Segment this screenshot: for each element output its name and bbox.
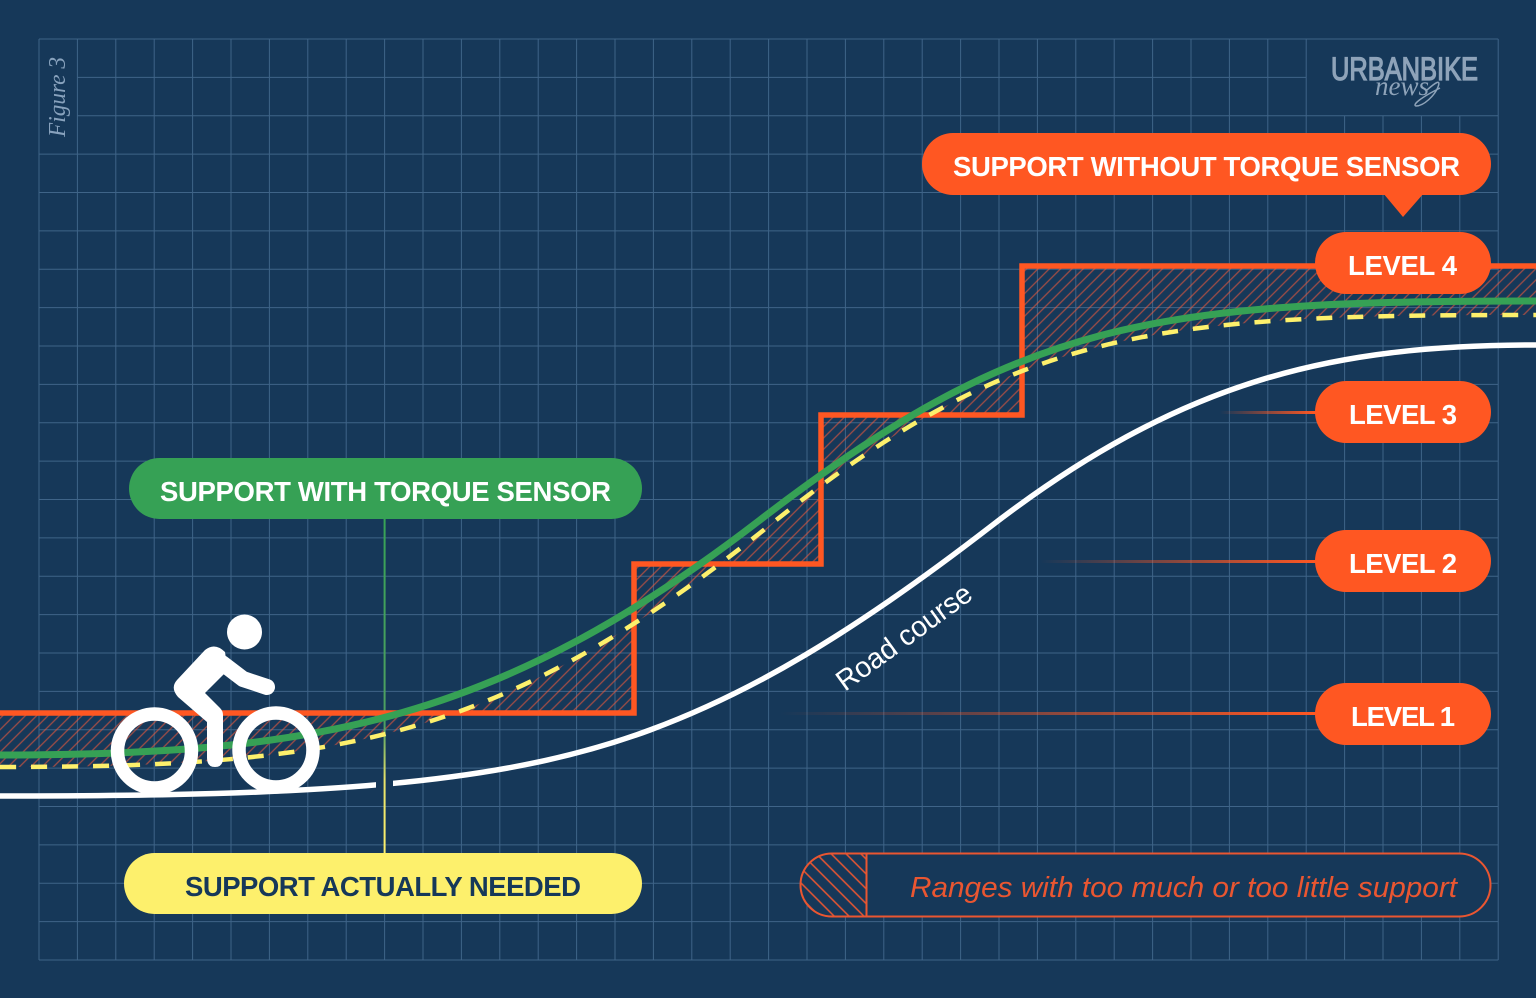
road course curve	[0, 345, 1536, 796]
label: level 4: LEVEL 4	[1348, 250, 1458, 281]
callout: support actually needed	[124, 853, 642, 914]
legend: ranges with too much or too little support	[800, 853, 1490, 917]
callout: support without torque sensor: SUPPORT WITHOUT TORQUE SENSOR	[953, 151, 1460, 182]
label: level 4	[1315, 232, 1491, 294]
logo: Urbanbike News: news	[1375, 71, 1429, 101]
label: level 1: LEVEL 1	[1351, 701, 1455, 732]
level guide line 3	[1220, 411, 1316, 414]
label: level 3: LEVEL 3	[1349, 399, 1457, 430]
road course label: Road course	[830, 578, 979, 698]
level guide line 1	[780, 712, 1316, 715]
hatched ranges with too much or too little support	[0, 266, 1536, 767]
leader line between torque sensor and needed support	[384, 519, 386, 853]
icon: cyclist	[118, 614, 313, 788]
figure label: Figure 3	[45, 57, 71, 138]
callout: support actually needed: SUPPORT ACTUALLY NEEDED	[185, 871, 581, 902]
label: level 2: LEVEL 2	[1349, 548, 1457, 579]
callout: support with torque sensor	[129, 458, 642, 519]
logo: Urbanbike News: URBANBIKE	[1331, 51, 1478, 87]
dashed line: support actually needed	[0, 315, 1536, 767]
stepped support without torque sensor	[0, 266, 1536, 713]
label: level 1	[1315, 683, 1491, 745]
legend: ranges with too much or too little support: Ranges with too much or too little support	[910, 872, 1459, 904]
logo: Urbanbike News	[1331, 51, 1478, 106]
green curve: support with torque sensor	[0, 301, 1536, 755]
label: level 3	[1315, 381, 1491, 443]
callout: support with torque sensor: SUPPORT WITH TORQUE SENSOR	[160, 476, 611, 507]
gap in road curve at leader	[376, 776, 393, 794]
callout: support without torque sensor	[922, 133, 1491, 217]
level guide line 2	[1040, 560, 1316, 563]
label: level 2	[1315, 530, 1491, 592]
